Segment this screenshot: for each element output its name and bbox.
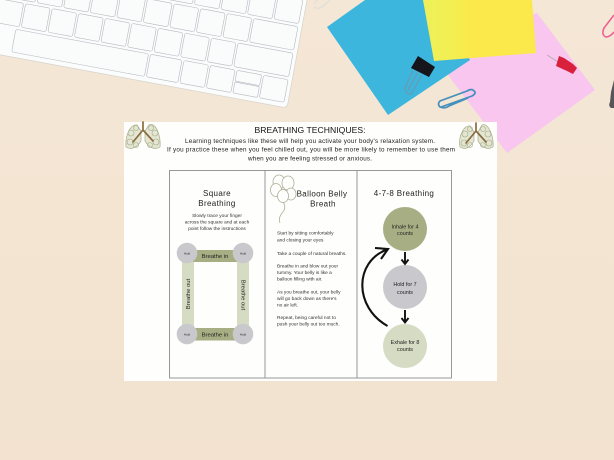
step: exhale: counts <box>397 347 413 353</box>
table frame <box>170 170 452 378</box>
instructions: Repeat, being careful not to <box>277 315 336 321</box>
square diagram: Breathe in <box>202 254 228 260</box>
introduction text: when you are feeling stressed or anxious. <box>247 156 372 162</box>
square diagram: Hold <box>184 252 190 256</box>
instructions <box>185 213 250 232</box>
square diagram <box>177 243 253 344</box>
binder clip <box>405 56 435 94</box>
title: BREATHING TECHNIQUES: <box>254 125 366 135</box>
step: hold <box>383 265 427 309</box>
column divider two <box>356 170 358 378</box>
instructions: point follow the instructions <box>188 226 246 232</box>
step: inhale: counts <box>397 231 413 237</box>
instructions: tummy. Your belly is like a <box>277 270 332 276</box>
column divider one <box>264 170 266 378</box>
instructions: will go back down as there's <box>277 296 337 302</box>
panel: square breathing: Breathing <box>198 199 236 208</box>
instructions: Take a couple of natural breaths. <box>277 251 347 257</box>
instructions: and closing your eyes <box>277 238 324 244</box>
icon: balloons <box>270 175 296 223</box>
square diagram: Breathe in <box>202 332 228 338</box>
yellow sticky note <box>423 0 536 61</box>
panel: balloon belly breath: Breath <box>310 200 336 208</box>
introduction text: Learning techniques like these will help you activate your body's relaxation system. <box>185 138 435 145</box>
square diagram: Hold <box>184 332 190 336</box>
pink sticky note <box>448 13 595 153</box>
arrow: exhale back to inhale <box>362 248 388 326</box>
square diagram: Hold <box>240 252 246 256</box>
instructions <box>277 230 347 328</box>
step: exhale <box>383 324 427 368</box>
instructions: As you breathe out, your belly <box>277 290 341 296</box>
arrow: hold to exhale <box>402 310 408 322</box>
instructions: across the square and at each <box>185 220 250 226</box>
icon: left lungs <box>126 122 160 148</box>
worksheet paper <box>124 122 497 381</box>
heading: square breathing: Square <box>203 189 231 198</box>
step: exhale: Exhale for 8 <box>391 340 419 346</box>
instructions: balloon filling with air. <box>277 276 322 282</box>
step: hold: counts <box>397 290 413 296</box>
introduction text: If you practice these when you feel chilled out, you will be more likely to remember to use them <box>167 146 455 154</box>
step: inhale: Inhale for 4 <box>392 224 418 230</box>
introduction text <box>167 138 455 162</box>
keyboard <box>0 0 316 108</box>
instructions: push your belly out too much. <box>277 322 340 328</box>
icon: right lungs <box>460 123 493 148</box>
arrow: inhale to hold <box>402 252 408 264</box>
instructions: Slowly trace your finger <box>192 213 242 219</box>
instructions: no air left. <box>277 302 298 308</box>
square diagram: Hold <box>240 332 246 336</box>
square diagram: Breathe out <box>239 280 245 311</box>
heading: 4-7-8 breathing: 4-7-8 Breathing <box>374 189 434 198</box>
panel: balloon belly breath <box>270 175 347 328</box>
heading: balloon belly breath: Balloon Belly <box>297 190 347 198</box>
paper clip: top left <box>314 0 330 8</box>
paper clip: blue <box>438 90 475 108</box>
panel: square breathing <box>177 189 253 344</box>
instructions: Breathe in and blow out your <box>277 264 338 270</box>
blue sticky note <box>327 0 470 115</box>
worksheet <box>124 122 497 381</box>
step: hold: Hold for 7 <box>393 282 417 288</box>
instructions: Start by sitting comfortably <box>277 230 334 236</box>
push pin <box>547 55 577 74</box>
panel: 4-7-8 breathing <box>362 189 434 368</box>
step: inhale <box>383 207 427 251</box>
square diagram: Breathe out <box>186 278 192 309</box>
paper clip: pink edge <box>603 15 614 37</box>
black clip at edge <box>609 80 614 108</box>
